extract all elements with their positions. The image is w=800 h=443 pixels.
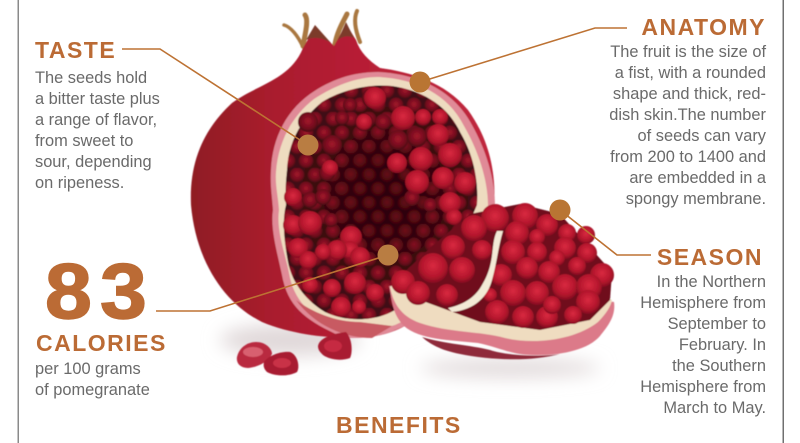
wedge rind pink	[389, 286, 614, 355]
text: taste: a range of flavor,	[35, 111, 157, 129]
wedge membrane strand	[448, 231, 503, 312]
text: anatomy: The fruit is the size of	[610, 43, 766, 61]
callout line: anatomy	[420, 28, 627, 82]
text: taste: The seeds hold	[35, 69, 147, 87]
text: taste: on ripeness.	[35, 174, 124, 192]
text: anatomy: a fist, with a rounded	[615, 64, 766, 82]
rim: cream inner	[276, 77, 488, 332]
text: anatomy: from 200 to 1400 and	[610, 148, 766, 166]
fruit body	[191, 24, 495, 338]
fruit bottom lobe	[296, 300, 392, 338]
left border line	[18, 0, 19, 443]
text: taste: from sweet to	[35, 132, 133, 150]
heading: benefits: BENEFITS	[336, 412, 462, 438]
text: season: the Southern	[672, 357, 766, 375]
text: season: Hemisphere from	[640, 378, 766, 396]
text: season	[640, 273, 766, 417]
cavity deep shade	[330, 135, 440, 255]
rim: pink outer	[271, 72, 495, 338]
cavity mid seeds	[298, 88, 437, 227]
wedge seeds	[391, 203, 614, 328]
heading: anatomy: ANATOMY	[641, 14, 766, 40]
text: calories: of pomegranate	[35, 381, 150, 399]
calyx dark top	[306, 22, 354, 43]
text: season: Hemisphere from	[640, 294, 766, 312]
text: season: February. In	[679, 336, 766, 354]
text: season: In the Northern	[657, 273, 766, 291]
stat: 83: 83	[45, 247, 155, 335]
cavity front seeds	[283, 87, 476, 317]
pomegranate illustration	[191, 11, 614, 375]
text: anatomy: are embedded in a	[629, 169, 766, 187]
wedge rind cream	[390, 230, 612, 341]
text: calories	[35, 360, 150, 399]
wedge dark underside	[422, 337, 560, 359]
cavity	[284, 86, 477, 319]
text: calories: per 100 grams	[35, 360, 141, 378]
text: anatomy: dish skin.The number	[609, 106, 766, 124]
heading: season: SEASON	[657, 244, 763, 270]
dot: season	[550, 200, 570, 220]
text: taste	[35, 69, 160, 192]
text: season: March to May.	[663, 399, 766, 417]
dot: calories	[378, 244, 398, 266]
wedge seed backing	[394, 204, 612, 330]
right border line	[782, 0, 784, 443]
text: anatomy: spongy membrane.	[626, 190, 766, 208]
loose seeds	[237, 332, 352, 375]
text: season: September to	[668, 315, 766, 333]
heading: calories: CALORIES	[36, 330, 167, 356]
callout line: taste	[122, 49, 300, 140]
ground shadow	[220, 324, 600, 377]
text: taste: a bitter taste plus	[35, 90, 160, 108]
text: taste: sour, depending	[35, 153, 152, 171]
heading: taste: TASTE	[35, 37, 116, 63]
dot: taste	[298, 134, 318, 156]
dot: anatomy	[410, 72, 430, 92]
calyx stems	[284, 11, 360, 47]
text: anatomy: of seeds can vary	[638, 127, 766, 145]
text: anatomy	[609, 43, 766, 208]
callout line: calories	[156, 255, 388, 311]
callout line: season	[560, 210, 651, 255]
text: anatomy: shape and thick, red-	[613, 85, 766, 103]
